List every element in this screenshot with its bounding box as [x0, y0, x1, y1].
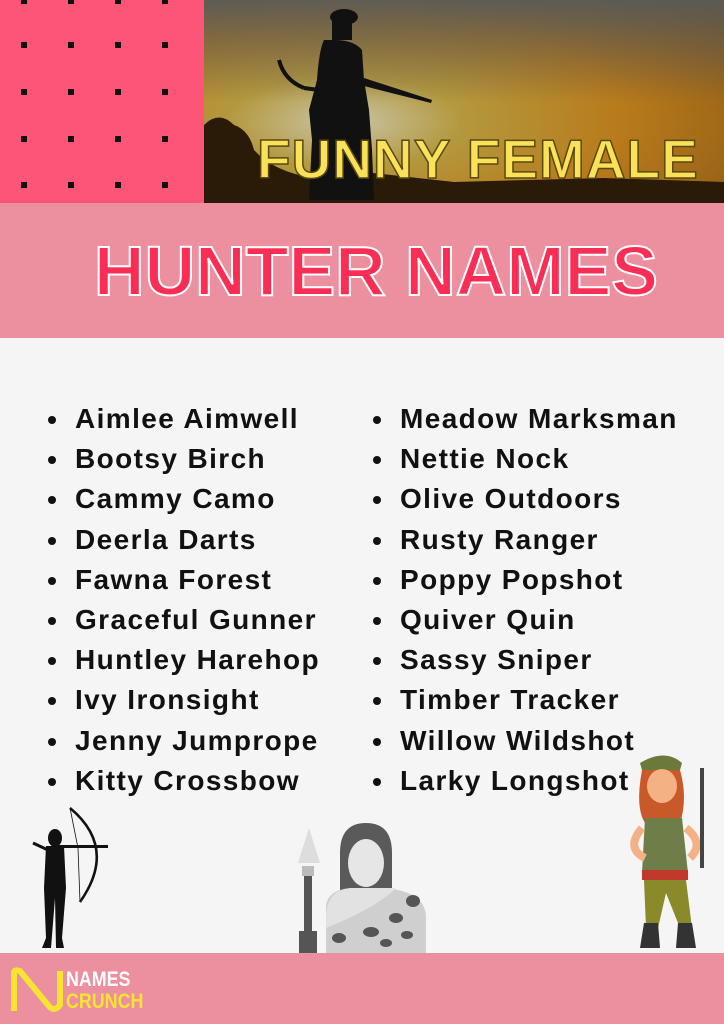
list: right column names: Rusty Ranger	[400, 524, 599, 555]
list: right column names: Sassy Sniper	[400, 644, 593, 675]
icon: cavewoman with spear	[298, 823, 426, 953]
list: right column names: Larky Longshot	[400, 765, 630, 796]
panel: footer band	[0, 953, 724, 1024]
list: left column names: Cammy Camo	[75, 483, 276, 514]
list: right column names: Nettie Nock	[400, 443, 569, 474]
list: left column names: Aimlee Aimwell	[75, 403, 299, 434]
list: left column names: Kitty Crossbow	[75, 765, 300, 796]
list: left column names: Huntley Harehop	[75, 644, 320, 675]
title: FUNNY FEMALE: FUNNY FEMALE	[257, 128, 699, 190]
list: left column names	[48, 403, 320, 796]
list: left column names: Bootsy Birch	[75, 443, 266, 474]
list: right column names: Quiver Quin	[400, 604, 576, 635]
list: right column names: Meadow Marksman	[400, 403, 678, 434]
list: right column names: Poppy Popshot	[400, 564, 624, 595]
list: right column names: Olive Outdoors	[400, 483, 622, 514]
title: HUNTER NAMES: HUNTER NAMES	[94, 232, 658, 310]
icon: cartoon huntress	[630, 756, 704, 948]
logo: Names Crunch: CRUNCH	[66, 990, 143, 1013]
icon: archer silhouette	[32, 807, 108, 948]
list: right column names: Willow Wildshot	[400, 725, 635, 756]
list: right column names: Timber Tracker	[400, 684, 620, 715]
logo: Names Crunch: NAMES	[66, 968, 130, 991]
panel: sunset photo with hunter silhouette	[204, 0, 724, 203]
list: left column names: Fawna Forest	[75, 564, 272, 595]
list: right column names	[373, 403, 678, 796]
list: left column names: Jenny Jumprope	[75, 725, 319, 756]
list: left column names: Ivy Ironsight	[75, 684, 260, 715]
logo: Names Crunch	[11, 967, 143, 1013]
panel: dotted pink square	[0, 0, 204, 203]
list: left column names: Deerla Darts	[75, 524, 257, 555]
list: left column names: Graceful Gunner	[75, 604, 317, 635]
panel: title band	[0, 203, 724, 338]
